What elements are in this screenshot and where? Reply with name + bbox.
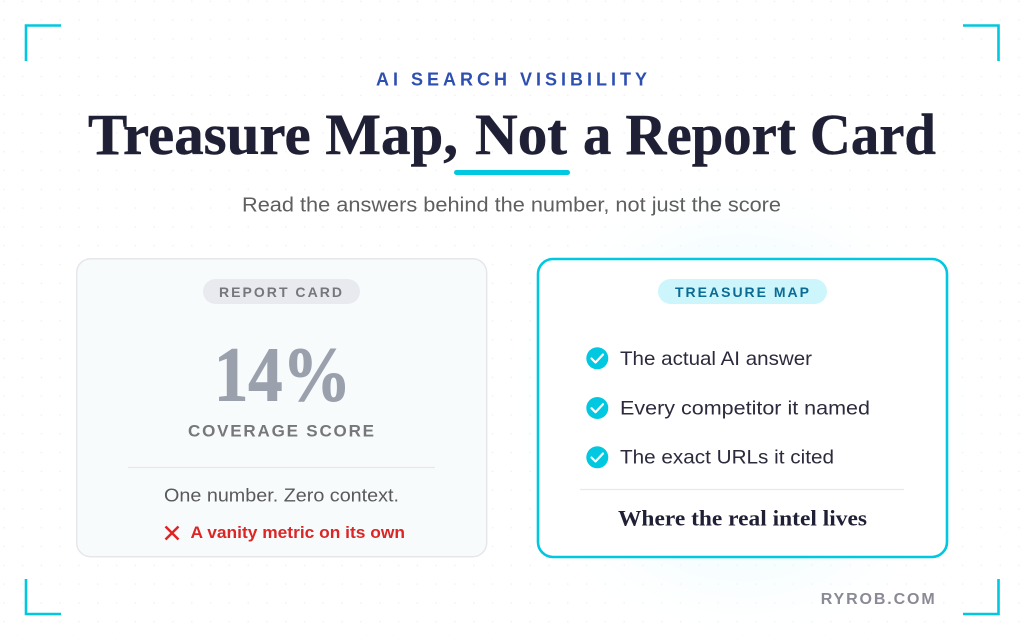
- badge: treasure map: TREASURE MAP: [675, 284, 809, 300]
- icon: red cross: [166, 526, 178, 540]
- footer brand: RYROB.COM: [821, 591, 935, 608]
- title underline: [454, 170, 570, 175]
- icon: check 2: [586, 397, 608, 419]
- score label: COVERAGE SCORE: [188, 422, 374, 440]
- title: Treasure Map,: [88, 102, 458, 167]
- big score: 14%: [214, 332, 351, 418]
- corner bracket: top right: [963, 26, 998, 61]
- report card note: One number. Zero context.: [164, 484, 399, 506]
- title: Not: [475, 102, 568, 167]
- badge: report card: [203, 279, 360, 304]
- eyebrow heading: AI SEARCH VISIBILITY: [376, 70, 647, 90]
- list item 2: Every competitor it named: [620, 397, 870, 419]
- list item 3: The exact URLs it cited: [620, 447, 834, 469]
- title: a Report Card: [583, 102, 936, 167]
- icon: check 1: [586, 347, 608, 369]
- corner bracket: top left: [26, 26, 61, 61]
- badge: treasure map: [658, 279, 827, 304]
- subtitle: Read the answers behind the number, not just the score: [242, 194, 781, 216]
- list item 1: The actual AI answer: [620, 348, 813, 370]
- corner bracket: bottom right: [963, 579, 998, 614]
- icon: check 3: [586, 446, 608, 468]
- treasure map takeaway: Where the real intel lives: [618, 506, 867, 530]
- title: [88, 102, 936, 167]
- panel: treasure map: [538, 259, 947, 557]
- badge: report card: REPORT CARD: [219, 284, 342, 300]
- warning text: A vanity metric on its own: [190, 523, 405, 542]
- corner bracket: bottom left: [26, 579, 61, 614]
- panel: report card: [77, 259, 487, 557]
